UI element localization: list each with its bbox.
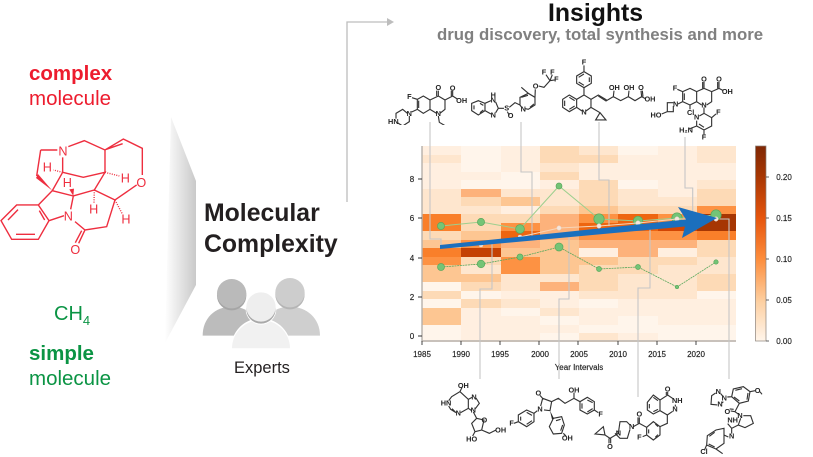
molecule: delafloxacin top 4: N xyxy=(673,100,678,109)
label: Experts: Experts xyxy=(234,359,290,377)
axes: 1990 xyxy=(452,350,470,359)
axes: 1995 xyxy=(491,350,509,359)
molecule: ezetimibe bottom 2: OH xyxy=(562,434,573,443)
molecule: delafloxacin top 4: F xyxy=(716,108,721,117)
molecule: delafloxacin top 4: O xyxy=(716,75,722,84)
molecule: pitavastatin top 3: OH xyxy=(609,83,620,92)
molecule: olaparib bottom 3: N xyxy=(629,422,634,431)
molecule: fluoroquinolone top 1 xyxy=(388,83,467,125)
molecule: olaparib bottom 3: N xyxy=(616,429,621,438)
molecule: benzimidazole sulfoxide top 2: N xyxy=(491,95,496,104)
molecule: olaparib bottom 3: N xyxy=(672,404,678,413)
molecule: ezetimibe bottom 2 xyxy=(509,385,603,443)
molecule: pitavastatin top 3: O xyxy=(638,83,644,92)
molecule: olaparib bottom 3: O xyxy=(607,442,613,451)
molecule: daridorexant bottom 4: N xyxy=(716,387,721,396)
series: upper green line xyxy=(437,183,721,233)
axes: 6 xyxy=(410,214,415,223)
molecule: benzimidazole sulfoxide top 2: H xyxy=(491,90,496,99)
molecule: olaparib bottom 3: F xyxy=(637,433,642,442)
icon: complex molecule structure: H xyxy=(43,161,52,175)
icon: complex molecule structure: H xyxy=(63,176,72,190)
axes: 2 xyxy=(410,293,415,302)
icon: complex molecule structure: N xyxy=(58,144,68,158)
label: complex molecule: molecule xyxy=(29,87,111,110)
axes: Year Intervals xyxy=(555,363,603,372)
label: complex molecule: complex xyxy=(29,62,112,85)
molecule: delafloxacin top 4: N xyxy=(694,113,699,122)
molecule: pitavastatin top 3: OH xyxy=(644,95,655,104)
axes: 2000 xyxy=(531,350,549,359)
label: simple molecule: simple xyxy=(29,342,94,365)
series: lower green line xyxy=(438,243,718,289)
molecule: ezetimibe bottom 2: N xyxy=(537,404,543,413)
axes xyxy=(410,146,736,372)
heading: Molecular Complexity: Complexity xyxy=(204,231,338,258)
molecule: delafloxacin top 4: F xyxy=(702,133,707,142)
molecule: ezetimibe bottom 2: F xyxy=(509,419,514,428)
molecule: ezetimibe bottom 2: F xyxy=(598,409,603,418)
colorbar: 0.20 xyxy=(776,173,792,182)
molecule: pitavastatin top 3: N xyxy=(581,107,587,116)
molecule: pentostatin bottom 1 xyxy=(441,381,506,442)
molecule: benzimidazole sulfoxide top 2: O xyxy=(508,111,514,120)
molecule: delafloxacin top 4: O xyxy=(701,75,707,84)
molecule: benzimidazole sulfoxide top 2: O xyxy=(533,82,539,91)
molecule: daridorexant bottom 4: N xyxy=(737,411,743,420)
molecule: daridorexant bottom 4: N xyxy=(717,400,723,409)
axes: 0 xyxy=(410,332,415,341)
icon: complex molecule structure: N xyxy=(64,209,73,223)
subheading: drug discovery, total synthesis and more xyxy=(437,25,763,44)
colorbar: 0.05 xyxy=(776,296,792,305)
heading: Molecular Complexity xyxy=(204,200,338,258)
axes: 2020 xyxy=(687,350,705,359)
colorbar: 0.10 xyxy=(776,255,792,264)
icon: complex molecule structure: O xyxy=(70,243,80,257)
molecule: benzimidazole sulfoxide top 2: N xyxy=(491,110,496,119)
axes: 2010 xyxy=(609,350,627,359)
icon: experts group xyxy=(202,278,320,348)
heading: Insights: Insights xyxy=(548,0,643,27)
molecule: daridorexant bottom 4: O xyxy=(755,386,761,395)
molecule: delafloxacin top 4: HO xyxy=(650,110,662,119)
axes: 4 xyxy=(410,254,415,263)
molecule: delafloxacin top 4: OH xyxy=(722,87,733,96)
molecule: fluoroquinolone top 1: N xyxy=(436,109,441,118)
arrow: trend xyxy=(440,207,717,249)
axes: 2015 xyxy=(648,350,666,359)
molecule: daridorexant bottom 4: Cl xyxy=(700,447,708,456)
molecule: ezetimibe bottom 2: O xyxy=(535,389,541,398)
molecule: fluoroquinolone top 1: OH xyxy=(456,96,467,105)
series: middle white line xyxy=(479,217,718,247)
icon: complex molecule structure: H xyxy=(121,171,130,185)
molecule: pitavastatin top 3 xyxy=(562,58,655,120)
molecule: pentostatin bottom 1: N xyxy=(456,409,461,418)
molecule: benzimidazole sulfoxide top 2: F xyxy=(550,68,555,77)
icon: complex molecule structure xyxy=(0,138,146,257)
arrow: complexity to insights xyxy=(346,18,394,202)
label: methane formula: CH4 xyxy=(54,303,90,328)
molecule: daridorexant bottom 4: N xyxy=(722,394,727,403)
molecule: pentostatin bottom 1: OH xyxy=(495,425,506,434)
molecule: fluoroquinolone top 1: O xyxy=(450,84,456,93)
molecule: pentostatin bottom 1: N xyxy=(471,405,476,414)
molecule: delafloxacin top 4: N xyxy=(701,100,707,109)
molecule: olaparib bottom 3: O xyxy=(636,410,642,419)
connector lines xyxy=(430,122,729,397)
molecule: olaparib bottom 3 xyxy=(594,384,683,451)
axes: 2005 xyxy=(570,350,588,359)
icon: complex molecule structure: H xyxy=(121,213,131,227)
molecule: fluoroquinolone top 1: F xyxy=(407,92,412,101)
molecule: daridorexant bottom 4: N xyxy=(729,431,734,440)
molecule: pentostatin bottom 1: OH xyxy=(458,381,469,390)
molecule: daridorexant bottom 4 xyxy=(700,386,762,456)
molecule: benzimidazole sulfoxide top 2 xyxy=(471,68,559,120)
molecule: delafloxacin top 4: F xyxy=(673,84,678,93)
molecule: fluoroquinolone top 1: O xyxy=(435,83,441,92)
molecule: delafloxacin top 4: Cl xyxy=(687,108,694,117)
molecule: pentostatin bottom 1: O xyxy=(481,415,487,424)
label: complex molecule xyxy=(29,62,112,110)
molecule: benzimidazole sulfoxide top 2: F xyxy=(542,68,547,77)
label: simple molecule: molecule xyxy=(29,367,111,390)
molecule: pitavastatin top 3: OH xyxy=(623,83,634,92)
axes: 8 xyxy=(410,175,415,184)
molecule: fluoroquinolone top 1: N xyxy=(407,109,412,118)
heading: Molecular Complexity: Molecular xyxy=(204,200,320,227)
molecule: olaparib bottom 3: NH xyxy=(672,396,683,405)
icon: complex molecule structure: H xyxy=(89,202,98,216)
molecule: daridorexant bottom 4: O xyxy=(724,407,730,416)
axes: 1985 xyxy=(413,350,431,359)
molecule: pitavastatin top 3: F xyxy=(582,58,587,67)
icon: complex molecule structure: O xyxy=(136,176,146,190)
molecule: delafloxacin top 4 xyxy=(650,75,733,142)
funnel shape xyxy=(170,118,196,333)
molecule: daridorexant bottom 4: NH xyxy=(727,415,738,424)
molecule: pentostatin bottom 1: N xyxy=(471,393,477,402)
heatmap xyxy=(422,146,736,342)
label: simple molecule xyxy=(29,342,111,390)
molecule: benzimidazole sulfoxide top 2: F xyxy=(554,75,559,84)
colorbar: 0.00 xyxy=(776,337,792,346)
molecule: delafloxacin top 4: H₂N xyxy=(679,125,693,134)
molecule: pentostatin bottom 1: HN xyxy=(441,399,451,408)
colorbar: 0.15 xyxy=(776,214,792,223)
molecule: benzimidazole sulfoxide top 2: N xyxy=(521,104,526,113)
molecule: benzimidazole sulfoxide top 2: S xyxy=(504,104,509,113)
molecule: olaparib bottom 3: O xyxy=(665,384,671,393)
colorbar xyxy=(755,146,792,346)
molecule: ezetimibe bottom 2: OH xyxy=(568,385,579,394)
